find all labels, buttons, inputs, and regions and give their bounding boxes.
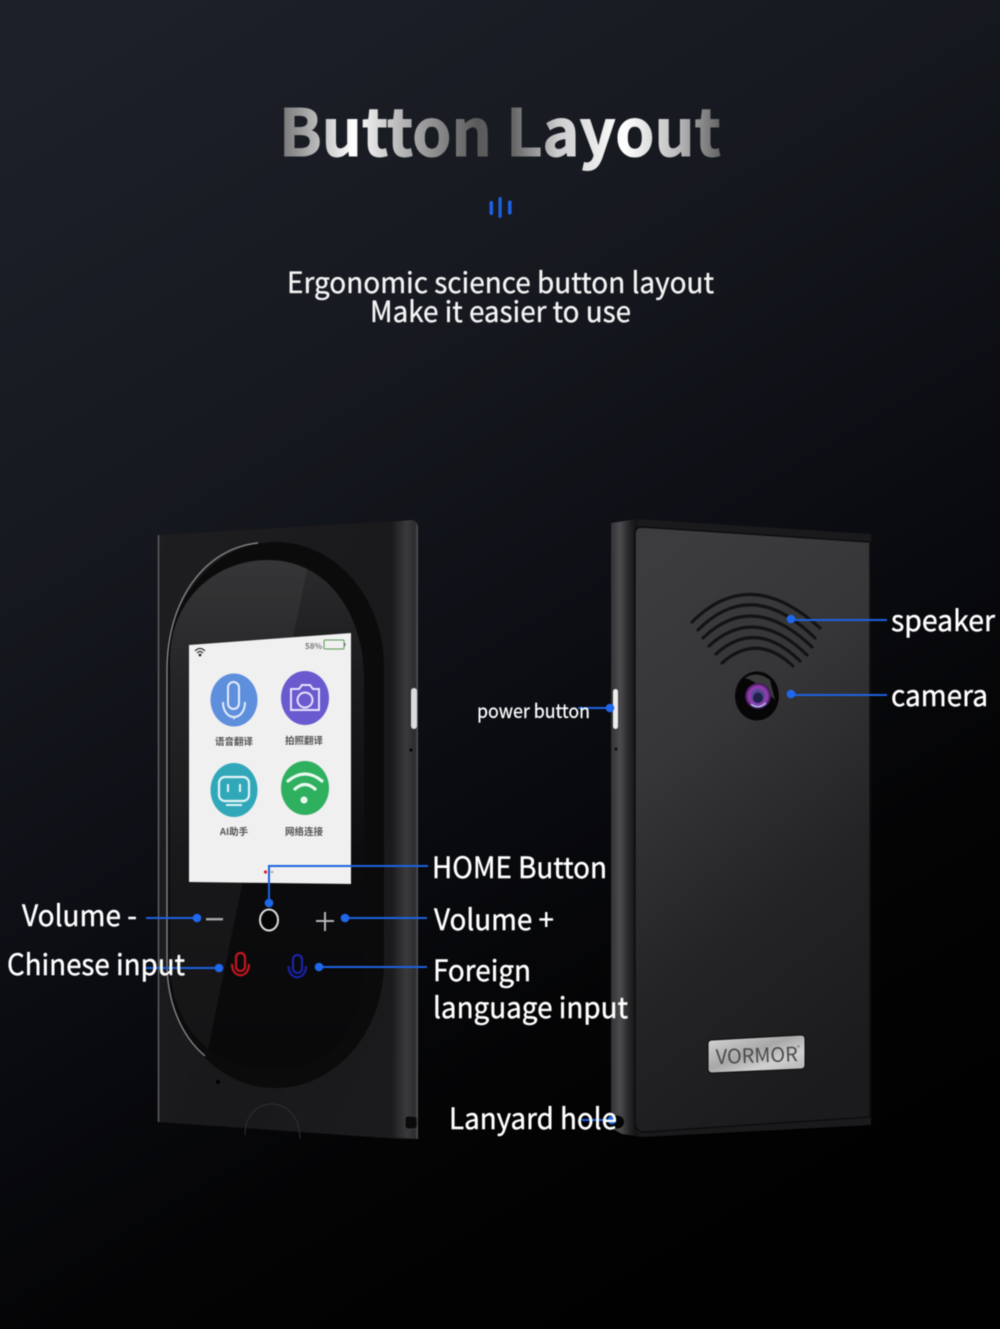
label: Lanyard hole: Lanyard hole — [449, 1096, 617, 1138]
red microphone — [232, 953, 249, 975]
lanyard slot — [405, 1116, 417, 1129]
screen — [189, 633, 351, 884]
lanyard hole — [610, 1116, 624, 1128]
front side edge — [392, 520, 418, 1139]
speaker grille — [692, 594, 820, 666]
label: power button: power button — [477, 695, 590, 724]
app icon: voice translation — [210, 674, 258, 726]
minus button — [206, 918, 223, 920]
icon: blue sound bars — [490, 197, 512, 218]
blue microphone — [288, 955, 306, 977]
subtitle: Make it easier to use — [370, 289, 631, 331]
device: front view — [158, 520, 418, 1139]
glass reflection — [170, 560, 306, 1048]
app icon: network — [281, 761, 329, 815]
power button — [613, 689, 618, 729]
bottom arc — [245, 1104, 300, 1139]
app labels: AI助手 — [219, 824, 249, 838]
callout labels — [7, 598, 996, 1138]
back outer body — [611, 519, 871, 1137]
callout lines and dots — [146, 615, 887, 1124]
status bar — [195, 640, 346, 656]
page dots — [264, 870, 273, 874]
label: Foreign language input: language input — [433, 985, 628, 1027]
device: back view — [610, 519, 871, 1137]
VORMOR badge: ® — [797, 1043, 800, 1052]
front body — [158, 520, 418, 1139]
camera — [735, 672, 779, 720]
label: Volume plus: Volume + — [434, 897, 554, 939]
label: Foreign language input — [433, 948, 628, 1027]
label: HOME Button: HOME Button — [432, 845, 607, 887]
plus button — [316, 912, 334, 931]
app icon: AI assistant — [210, 763, 258, 817]
app labels: 拍照翻译 — [285, 733, 323, 747]
page content — [7, 81, 996, 1139]
microphone hole — [216, 1080, 220, 1084]
app labels: 网络连接 — [285, 824, 323, 838]
label: Chinese input: Chinese input — [7, 942, 185, 984]
app labels: 语音翻译 — [215, 734, 253, 748]
pill glass — [170, 560, 364, 1070]
label: Foreign language input: Foreign — [433, 948, 531, 990]
back panel — [635, 527, 870, 1132]
app icon: photo translation — [281, 671, 329, 725]
subtitle — [287, 260, 714, 331]
status bar: 58% — [305, 641, 322, 652]
label: camera: camera — [891, 673, 988, 715]
home button — [260, 910, 278, 930]
subtitle: Ergonomic science button layout — [287, 260, 714, 302]
side power button — [411, 688, 417, 729]
title: Button Layout — [279, 81, 721, 175]
app labels — [215, 733, 323, 838]
label: Volume minus: Volume - — [22, 893, 137, 935]
pill bezel — [167, 542, 384, 1088]
VORMOR badge: VORMOR — [715, 1038, 798, 1070]
pill glossy edge — [167, 543, 258, 1056]
label: speaker: speaker — [891, 598, 996, 640]
back side edge — [611, 519, 637, 1136]
